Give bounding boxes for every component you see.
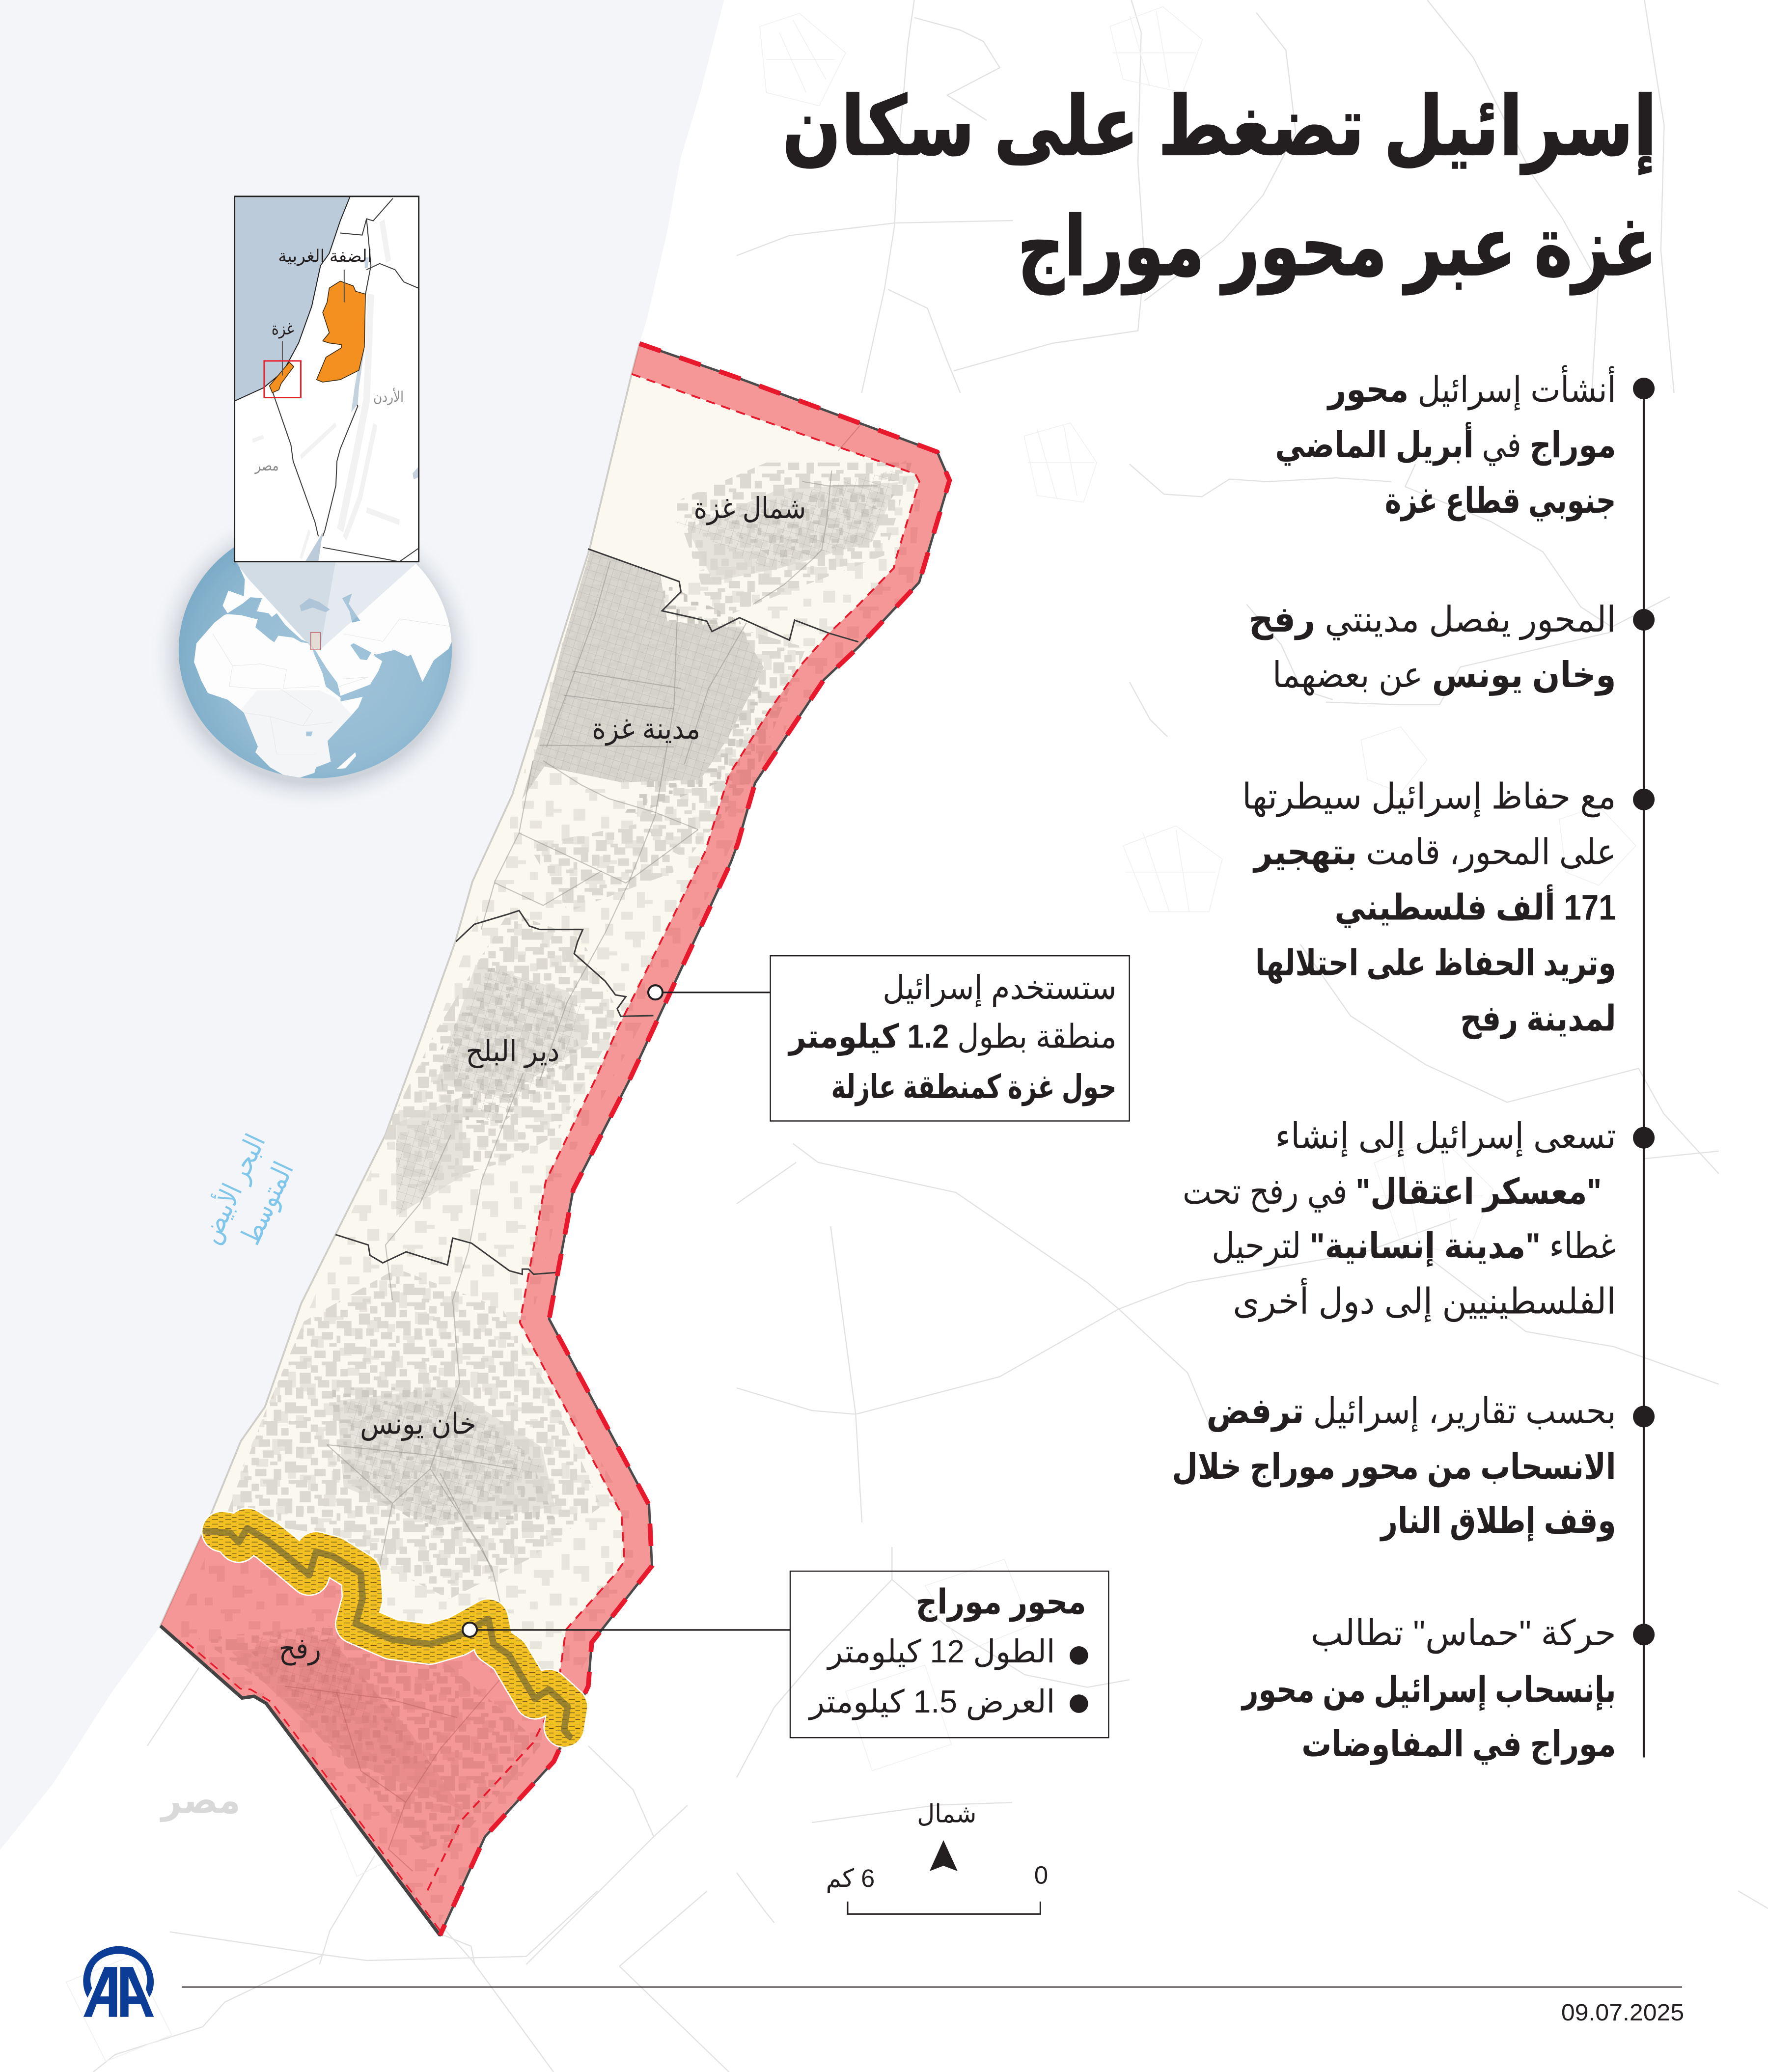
- timeline line: [1643, 390, 1644, 1758]
- text block: item 6: [1241, 1613, 1655, 1765]
- scale bar: [826, 1861, 1048, 1914]
- timeline dot: [1633, 1406, 1655, 1427]
- globe continents: [194, 562, 452, 778]
- text block: item 3: مع حفاظ إسرائيل سيطرتها: [1242, 777, 1616, 818]
- bullet: [1070, 1646, 1088, 1665]
- north arrow: [917, 1799, 976, 1871]
- inset label: Egypt: مصر: [254, 458, 279, 474]
- globe ocean: [179, 522, 452, 778]
- text block: item 5: [1172, 1391, 1655, 1542]
- map: inner red dashed line: [425, 374, 919, 1896]
- inset label: West Bank: الضفة الغربية: [278, 247, 372, 266]
- panel: Gaza Strip map: [159, 344, 949, 1935]
- timeline dot: [1633, 1624, 1655, 1645]
- red locator rectangle: [264, 361, 301, 398]
- West Bank leader: [344, 270, 345, 302]
- inset map: [235, 196, 419, 562]
- footer rule: [182, 1987, 1682, 1988]
- map: Morag corridor: [206, 1528, 569, 1737]
- text block: item 2: [1249, 600, 1655, 696]
- map: buffer zone pink band: [520, 344, 949, 1711]
- inset label: Jordan: الأردن: [373, 387, 404, 405]
- icon: Anadolu Agency logo: [83, 1946, 154, 2017]
- label: Egypt: مصر: [159, 1780, 241, 1823]
- map: governorate boundaries: [335, 549, 858, 1274]
- funnel from globe to inset: [235, 561, 417, 650]
- text block: item 1: أنشأت إسرائيل محور: [1326, 365, 1616, 411]
- map: Gaza City dense core: [522, 550, 764, 800]
- inset frame: [235, 196, 419, 562]
- text block: item 3: وتريد الحفاظ على احتلالها: [1255, 943, 1616, 984]
- globe locator: [162, 535, 467, 798]
- timeline dot: [1633, 378, 1655, 399]
- scale bar: 6 كم: [826, 1864, 875, 1893]
- sea: [0, 0, 724, 1850]
- text block: item 3: [1242, 777, 1655, 1040]
- inset terrain relief: [252, 221, 399, 559]
- callout: buffer zone: منطقة بطول 1.2 كيلومتر: [788, 1019, 1117, 1056]
- text block: item 5: وقف إطلاق النار: [1379, 1501, 1616, 1542]
- map: outer red dashed line: [440, 344, 949, 1935]
- timeline dot: [1633, 789, 1655, 810]
- callout: Morag corridor: الطول 12 كيلومتر: [827, 1634, 1055, 1670]
- title: [782, 81, 1657, 295]
- inset sea: [235, 196, 350, 401]
- text block: item 4: غطاء "مدينة إنسانية" لترحيل: [1212, 1226, 1616, 1267]
- label: north Gaza: شمال غزة: [694, 492, 806, 525]
- callout connector: [656, 992, 771, 993]
- callout: Morag corridor: [463, 1571, 1108, 1738]
- map: southwest border line: [161, 1626, 440, 1935]
- text block: item 2: وخان يونس عن بعضهما: [1272, 655, 1616, 696]
- callout marker: [648, 985, 663, 999]
- text block: item 4: [1183, 1116, 1655, 1323]
- text block: item 5: الانسحاب من محور موراج خلال: [1172, 1447, 1616, 1488]
- callout: Morag corridor: محور موراج: [916, 1582, 1086, 1622]
- map: outer border line: [161, 344, 949, 1935]
- Gaza leader: [282, 341, 283, 376]
- map: urban density texture: [172, 422, 925, 1929]
- text block: item 4: الفلسطينيين إلى دول أخرى: [1233, 1278, 1616, 1323]
- place labels: [159, 492, 806, 1823]
- Gaza shape: [270, 362, 294, 393]
- bullet: [1070, 1694, 1088, 1713]
- label: Mediterranean Sea second line: المتوسط: [234, 1157, 300, 1249]
- inset gulf and lakes: [305, 532, 323, 562]
- globe location marker: [311, 633, 320, 650]
- text block: item 6: حركة "حماس" تطالب: [1311, 1613, 1616, 1654]
- callout: Morag corridor: العرض 1.5 كيلومتر: [808, 1684, 1055, 1720]
- timeline dot: [1633, 609, 1655, 631]
- callout: buffer zone: [648, 956, 1130, 1121]
- label: Gaza City: مدينة غزة: [592, 712, 700, 746]
- map: Gaza base land: [161, 344, 949, 1935]
- inset borders: [271, 198, 418, 562]
- text block: item 1: موراج في أبريل الماضي: [1275, 422, 1616, 466]
- callout box: [771, 956, 1130, 1121]
- text block: item 1: [1275, 365, 1655, 522]
- text block: item 3: على المحور، قامت بتهجير: [1252, 832, 1616, 873]
- date: 09.07.2025: [1561, 1999, 1684, 2026]
- text block: item 3: 171 ألف فلسطيني: [1334, 884, 1616, 929]
- text block: item 2: المحور يفصل مدينتي رفح: [1249, 600, 1616, 640]
- footer: [83, 1946, 1684, 2026]
- label: Rafah: رفح: [279, 1632, 321, 1666]
- West Bank shape: [317, 281, 365, 382]
- text block: item 3: لمدينة رفح: [1460, 999, 1616, 1040]
- north arrow: شمال: [917, 1799, 976, 1827]
- map: road lines inside Gaza: [285, 422, 878, 1871]
- map: soft urban cores: [231, 482, 899, 1810]
- text block: item 6: بإنسحاب إسرائيل من محور: [1241, 1670, 1616, 1711]
- text block: item 5: بحسب تقارير، إسرائيل ترفض: [1207, 1391, 1616, 1432]
- timeline dot: [1633, 1127, 1655, 1149]
- text block: item 6: موراج في المفاوضات: [1301, 1724, 1616, 1765]
- text block: item 4: تسعى إسرائيل إلى إنشاء: [1275, 1116, 1616, 1157]
- scale bar: 0: [1034, 1861, 1048, 1889]
- globe shadow: [148, 499, 481, 811]
- map: Rafah cleared zone: [161, 1528, 569, 1935]
- callout marker: [463, 1623, 477, 1637]
- callout box: [790, 1571, 1108, 1738]
- text block: item 4: "معسكر اعتقال" في رفح تحت: [1183, 1172, 1602, 1213]
- icon: north arrowhead: [930, 1840, 958, 1871]
- label: Mediterranean Sea: البحر الأبيض: [193, 1129, 272, 1248]
- label: Deir al-Balah: دير البلح: [466, 1035, 559, 1069]
- inset label: Gaza: غزة: [272, 319, 294, 339]
- map: southwest red dashed line: [185, 1641, 440, 1931]
- inset background: [235, 196, 419, 562]
- callout: buffer zone: ستستخدم إسرائيل: [883, 969, 1117, 1007]
- text block: item 1: جنوبي قطاع غزة: [1385, 481, 1616, 522]
- label: Khan Younis: خان يونس: [360, 1407, 476, 1441]
- callout: buffer zone: حول غزة كمنطقة عازلة: [831, 1069, 1117, 1106]
